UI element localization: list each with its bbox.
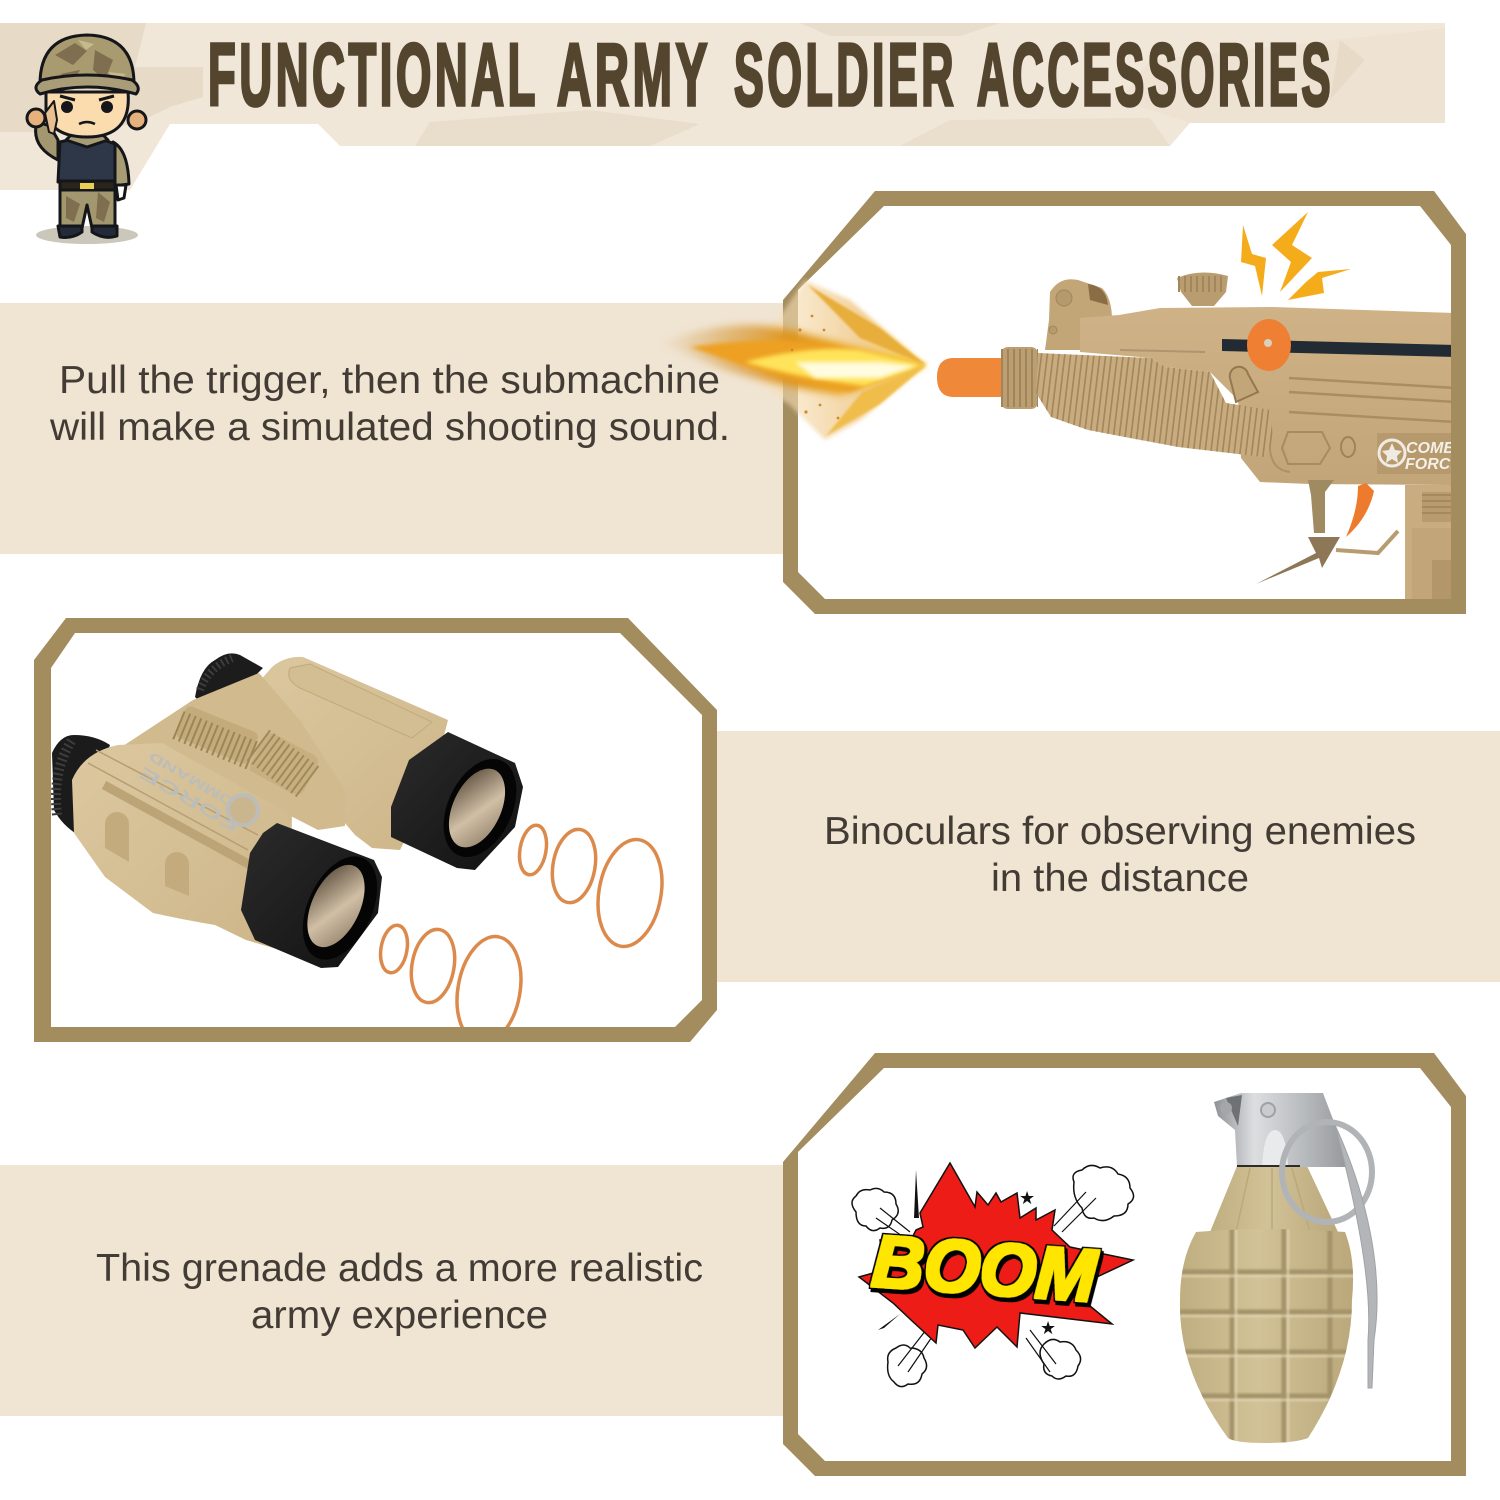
trigger guard bbox=[1336, 531, 1398, 553]
front objective lens bbox=[241, 823, 382, 968]
frame border bbox=[34, 618, 717, 1042]
panel: binoculars image frame bbox=[34, 618, 717, 1049]
frame border bbox=[783, 191, 1466, 614]
ribbed handguard bbox=[1036, 353, 1272, 457]
muzzle flash bbox=[660, 280, 926, 440]
soldier face bbox=[45, 92, 128, 137]
grenade pull ring bbox=[1282, 1122, 1372, 1222]
title: SOLDIER bbox=[734, 25, 957, 124]
silver logo bbox=[140, 754, 236, 831]
panel: submachine gun image frame bbox=[660, 191, 1476, 614]
arrow pointing to trigger bbox=[1256, 537, 1340, 584]
silver logo: COMMAND bbox=[146, 749, 251, 818]
front sight bbox=[1045, 279, 1116, 350]
panel: submachine gun description band bbox=[0, 303, 784, 554]
gun description text: Pull the trigger, then the submachine bbox=[59, 359, 720, 402]
front barrel body bbox=[72, 743, 292, 950]
safety details bbox=[1282, 432, 1330, 464]
toy submachine gun bbox=[937, 272, 1476, 602]
black stars: ★ bbox=[1019, 1188, 1035, 1209]
smoke puffs bbox=[852, 1165, 1134, 1387]
boom lettering: BOOM bbox=[869, 1219, 1100, 1318]
frame border bbox=[783, 1053, 1466, 1476]
band background bbox=[0, 303, 784, 554]
orange muzzle tip bbox=[937, 358, 1004, 397]
soldier ears bbox=[27, 109, 146, 129]
panel: binoculars description band bbox=[717, 731, 1500, 982]
soldier legs and boots bbox=[58, 186, 117, 237]
receiver bbox=[1080, 307, 1455, 485]
orange trigger bbox=[1346, 483, 1374, 537]
grenade neck bbox=[1210, 1166, 1338, 1232]
hand grenade bbox=[1178, 1093, 1377, 1445]
band background bbox=[717, 731, 1500, 982]
binoculars description text: Binoculars for observing enemies bbox=[824, 810, 1416, 853]
top knob bbox=[1177, 272, 1228, 306]
rear grip magazine bbox=[1405, 485, 1451, 599]
soldier vest and belt bbox=[58, 134, 115, 190]
icon: saluting soldier mascot bbox=[27, 35, 146, 244]
soldier arms bbox=[36, 122, 129, 200]
bridge and focus wheels bbox=[120, 673, 345, 830]
band background bbox=[0, 1165, 784, 1416]
toy submachine gun: FORCE bbox=[1405, 456, 1462, 473]
title: FUNCTIONAL bbox=[208, 25, 539, 124]
grenade body bbox=[1180, 1229, 1353, 1443]
receiver grooves bbox=[1289, 378, 1455, 422]
soldier shadow bbox=[36, 226, 138, 244]
charging slot bbox=[1222, 339, 1455, 357]
rear objective lens bbox=[391, 732, 523, 870]
lightning bolts bbox=[1241, 212, 1351, 300]
grenade safety lever bbox=[1335, 1125, 1377, 1388]
toy submachine gun: COMBAT bbox=[1406, 440, 1476, 457]
silver logo: FORCE bbox=[136, 763, 243, 835]
banner: camouflage title strip bbox=[0, 23, 1445, 190]
barrel collar bbox=[1001, 347, 1038, 409]
logo plate bbox=[1377, 433, 1455, 474]
black stars bbox=[1019, 1188, 1056, 1339]
grenade description text: army experience bbox=[251, 1294, 548, 1337]
red starburst bbox=[859, 1163, 1133, 1348]
rear barrel body bbox=[263, 656, 448, 850]
black stars: ★ bbox=[1040, 1318, 1056, 1339]
binoculars description text: in the distance bbox=[991, 857, 1249, 900]
brown foregrip bbox=[1308, 480, 1334, 533]
grenade silver cap bbox=[1214, 1093, 1348, 1167]
grenade segment grooves bbox=[1178, 1228, 1356, 1445]
title: ARMY bbox=[557, 25, 711, 124]
panel: grenade image frame bbox=[783, 1053, 1466, 1476]
front eyepiece bbox=[52, 735, 110, 835]
rear eyepiece bbox=[195, 653, 263, 698]
title bbox=[208, 25, 1334, 124]
gun description text: will make a simulated shooting sound. bbox=[49, 406, 730, 449]
panel: grenade description band bbox=[0, 1165, 784, 1416]
burst spark marks bbox=[878, 1170, 919, 1330]
toy binoculars bbox=[52, 653, 670, 1049]
boom comic burst bbox=[852, 1163, 1134, 1387]
cocking knob bbox=[1247, 319, 1291, 371]
grenade description text: This grenade adds a more realistic bbox=[96, 1247, 703, 1290]
soldier helmet bbox=[36, 35, 138, 94]
orange view rings bbox=[378, 824, 664, 1027]
sling swivel bbox=[1230, 367, 1258, 402]
